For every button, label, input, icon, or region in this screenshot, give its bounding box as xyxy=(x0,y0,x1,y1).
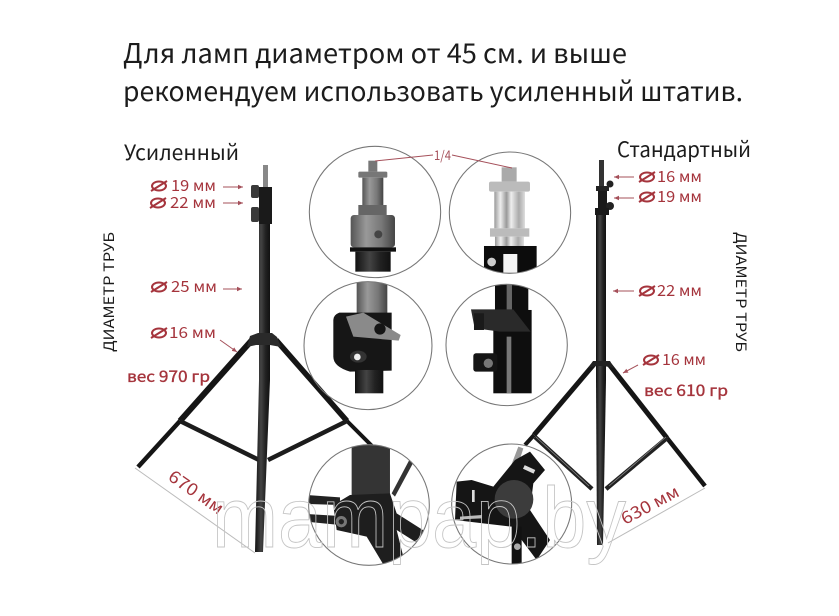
label: 16 mm: 16 мм xyxy=(169,321,216,343)
label: 19 mm xyxy=(151,174,243,196)
detail circle: standard top spigot xyxy=(449,152,571,273)
heading: standard stand: Стандартный xyxy=(617,134,751,164)
reinforced tripod xyxy=(138,165,372,552)
label: 22 mm xyxy=(613,279,702,301)
dimension: 630 mm: 630 мм xyxy=(616,478,683,529)
label: 16 mm bottom: 16 мм xyxy=(662,348,706,370)
label: 16 mm bottom xyxy=(623,348,706,373)
weight: standard: вес 610 гр xyxy=(644,377,728,401)
label: 19 mm xyxy=(614,185,702,207)
labels: standard tube diameters xyxy=(613,165,706,373)
label: 22 mm: 22 мм xyxy=(170,191,216,213)
weight: reinforced: вес 970 гр xyxy=(127,363,210,387)
detail circle: reinforced clamp xyxy=(304,282,432,410)
label: 19 mm: 19 мм xyxy=(657,185,702,207)
dimension: 630 mm xyxy=(608,478,705,543)
label: 22 mm xyxy=(150,191,243,213)
label: 22 mm: 22 мм xyxy=(657,279,702,301)
title: рекомендуем использовать усиленный штатив. xyxy=(123,70,743,109)
label: 16 mm top xyxy=(614,165,702,187)
label: 19 mm: 19 мм xyxy=(171,174,216,196)
dimension: 670 mm: 670 мм xyxy=(164,463,230,519)
label: 16 mm xyxy=(151,321,237,352)
standard tripod xyxy=(525,160,705,545)
title: Для ламп диаметром от 45 см. и выше xyxy=(123,32,627,71)
title xyxy=(123,32,743,109)
label: 25 mm xyxy=(151,275,242,297)
label: 25 mm: 25 мм xyxy=(171,275,217,297)
vertical label: standard: ДИАМЕТР ТРУБ xyxy=(731,232,752,352)
watermark: mampap.by xyxy=(212,471,626,566)
label: 16 mm top: 16 мм xyxy=(657,165,702,187)
detail circle: standard hub xyxy=(452,444,572,567)
callout: 1/4 thread: 1/4 xyxy=(434,145,451,164)
detail circle: reinforced top spigot xyxy=(309,146,441,278)
heading: reinforced stand: Усиленный xyxy=(124,137,239,167)
dimension: 670 mm xyxy=(135,463,255,553)
detail circle: reinforced hub xyxy=(307,443,433,570)
callout: 1/4 thread xyxy=(375,145,512,168)
detail circle: standard clamp xyxy=(446,284,567,406)
vertical label: reinforced: ДИАМЕТР ТРУБ xyxy=(98,232,119,352)
labels: reinforced tube diameters xyxy=(150,174,243,352)
